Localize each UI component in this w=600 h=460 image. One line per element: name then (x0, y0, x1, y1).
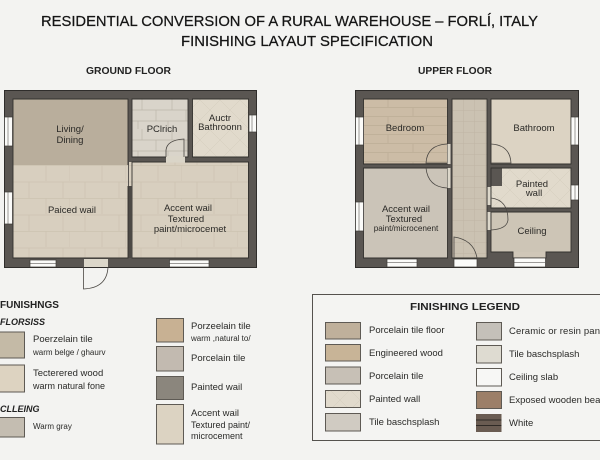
legend item: tile backsplash (326, 414, 439, 431)
interior wall (128, 186, 132, 258)
room: living dining (13, 99, 128, 165)
legend item: painted wall (326, 390, 420, 408)
legend item: ceiling slab (476, 368, 558, 386)
room: living dining: Dining (57, 135, 83, 146)
item: textured wood (0, 365, 105, 392)
corridor (452, 99, 487, 258)
windows (4, 115, 256, 267)
ground floor plan (4, 90, 257, 289)
room: painted wall: Painted (516, 179, 548, 190)
legend item: painted wall: Painted wall (369, 394, 420, 405)
item: porcelain tile: warm belge / ghaurv (32, 348, 105, 357)
room: porch (132, 99, 188, 157)
legend item: porcelain tile (326, 367, 423, 384)
legend item: tile backsplash: Tile baschsplash (369, 417, 439, 428)
room outlines (13, 99, 248, 258)
room: auxiliary bathroom: Bathroonn (198, 122, 242, 133)
room: ceiling: Ceiling (517, 226, 547, 237)
subheading: ceiling: CLLEING (0, 404, 40, 414)
room: auxiliary bathroom: Auctr (209, 113, 231, 124)
subheading: floors: FLORSISS (0, 317, 45, 327)
room: painted wall: wall (525, 188, 542, 199)
legend item: tile backsplash (476, 346, 579, 363)
item: painted wall (156, 376, 242, 400)
legend item: engineered wood (326, 344, 443, 361)
item: porcelain tile (156, 346, 245, 371)
item: warm gray: Warm gray (33, 422, 72, 431)
room: bedroom (364, 99, 448, 164)
windows (356, 117, 578, 267)
panel: finishing legend (312, 294, 600, 440)
heading: finishings: FUNISHNGS (0, 300, 59, 311)
item: accent wall (156, 404, 251, 444)
legend item: ceiling slab: Ceiling slab (509, 372, 558, 383)
entrance door (84, 259, 108, 289)
item: warm gray (0, 418, 72, 437)
item: textured wood: warm natural fone (32, 381, 105, 391)
item: painted wall: Painted wail (191, 382, 242, 393)
item: porcelain tile: Porcelain tile (191, 353, 245, 364)
room: painted wall (491, 168, 571, 208)
room: ceiling (491, 212, 571, 258)
item: porcelain tile (0, 332, 105, 358)
legend item: white: White (509, 418, 533, 429)
door swings (426, 144, 511, 258)
room outlines (364, 99, 571, 258)
title: FINISHING LAYAUT SPECIFICATION (181, 33, 433, 50)
item: textured wood: Tecterered wood (33, 368, 103, 379)
legend item: exposed wooden beam (476, 392, 600, 408)
opening: porch door (166, 139, 185, 162)
room: tiled wall area (13, 165, 128, 258)
legend heading: FINISHING LEGEND (410, 301, 520, 313)
heading: upper floor: UPPER FLOOR (418, 65, 492, 77)
room: accent wall: Textured (386, 214, 422, 225)
room: bathroom: Bathroom (513, 123, 555, 134)
room: accent wall: Accent wail (382, 204, 430, 215)
room: tiled wall area: Paiced wail (48, 205, 96, 216)
room: living dining: Living/ (56, 124, 84, 135)
legend item: porcelain tile floor: Porcelain tile floor (369, 325, 445, 336)
item: porcelain tile warm natural: Porzeelain tile (191, 321, 251, 332)
room: bedroom: Bedroom (386, 123, 424, 134)
item: porcelain tile: Poerzelain tile (33, 334, 93, 345)
title: RESIDENTIAL CONVERSION OF A RURAL WAREHOUSE – FORLÍ, ITALY (41, 13, 538, 30)
upper floor plan (355, 90, 579, 268)
room: auxiliary bathroom (192, 99, 248, 157)
room: accent wall: Textured (168, 214, 204, 225)
room: accent wall (364, 168, 448, 258)
legend item: white (476, 414, 533, 432)
title (41, 13, 538, 50)
item: accent wall: Textured paint/ (191, 420, 251, 430)
item: accent wall: Accent wail (191, 408, 239, 419)
heading: ground floor: GROUND FLOOR (86, 65, 171, 77)
item: accent wall: microcement (191, 431, 243, 441)
room: bathroom (491, 99, 571, 164)
room: accent wall (129, 162, 248, 258)
legend item: ceramic or resin panel (476, 322, 600, 340)
room: porch: PClrich (147, 124, 177, 135)
legend item: engineered wood: Engineered wood (369, 348, 443, 359)
legend item: porcelain tile: Porcelain tile (369, 371, 423, 382)
item: porcelain tile warm natural (156, 318, 251, 343)
room: accent wall: paint/microcenent (374, 224, 439, 233)
room: accent wall: paint/microcemet (154, 224, 227, 235)
room: accent wall: Accent wail (164, 203, 212, 214)
finishes list (0, 300, 251, 444)
item: porcelain tile warm natural: warm ,natural to/ (190, 334, 251, 343)
legend item: porcelain tile floor (326, 322, 445, 339)
legend item: tile backsplash: Tile baschsplash (509, 349, 579, 360)
